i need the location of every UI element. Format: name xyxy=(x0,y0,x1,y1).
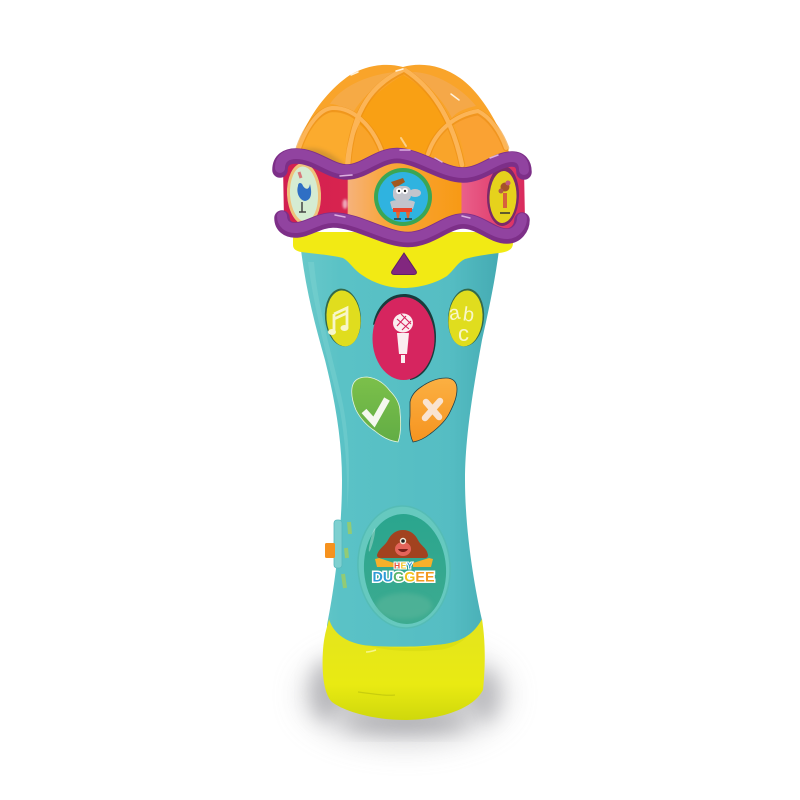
icon: cross xyxy=(425,401,440,418)
logo: HEY DUGGEE xyxy=(372,560,434,584)
dome ribs xyxy=(299,70,506,165)
icon: tick xyxy=(364,399,387,422)
dome panels xyxy=(356,75,450,158)
button: music note xyxy=(322,287,363,348)
yellow collar xyxy=(293,232,513,288)
bottom purple wave xyxy=(282,216,522,240)
orange dome xyxy=(296,65,509,180)
bird figure xyxy=(297,172,311,212)
logo: HEY DUGGEE: DUGGEE xyxy=(372,568,434,584)
mouse figure xyxy=(498,180,510,213)
text: abc: b xyxy=(462,303,476,327)
purple triangle arrow xyxy=(392,253,416,274)
side switch xyxy=(325,520,350,588)
button: microphone xyxy=(372,294,436,380)
text: abc: a xyxy=(447,302,463,325)
button: abc xyxy=(446,287,487,348)
microphone toy xyxy=(280,65,525,720)
text: abc: c xyxy=(458,321,469,346)
button: cross xyxy=(410,378,457,442)
yellow base xyxy=(323,619,485,720)
band highlights xyxy=(335,150,498,218)
medallion: bird xyxy=(285,162,323,226)
top purple wave xyxy=(280,154,524,175)
switch knob xyxy=(325,543,335,558)
medallion: mouse xyxy=(486,165,520,227)
medallion: character with hat xyxy=(374,168,432,226)
logo: HEY DUGGEE: HEY xyxy=(394,560,413,570)
dome shell xyxy=(296,65,509,180)
microphone handle xyxy=(301,250,499,655)
Hey Duggee window xyxy=(354,503,454,631)
icon: music notes xyxy=(334,308,347,332)
logo arms xyxy=(375,558,433,567)
Duggee dog icon xyxy=(377,530,428,558)
icon: white microphone xyxy=(393,314,413,363)
text: abc xyxy=(447,302,476,346)
button: check xyxy=(352,377,401,442)
character figure xyxy=(390,178,421,219)
decorated band xyxy=(280,150,525,240)
soft floor shadow xyxy=(305,649,505,741)
band background xyxy=(283,155,525,239)
dome highlights xyxy=(351,69,459,146)
